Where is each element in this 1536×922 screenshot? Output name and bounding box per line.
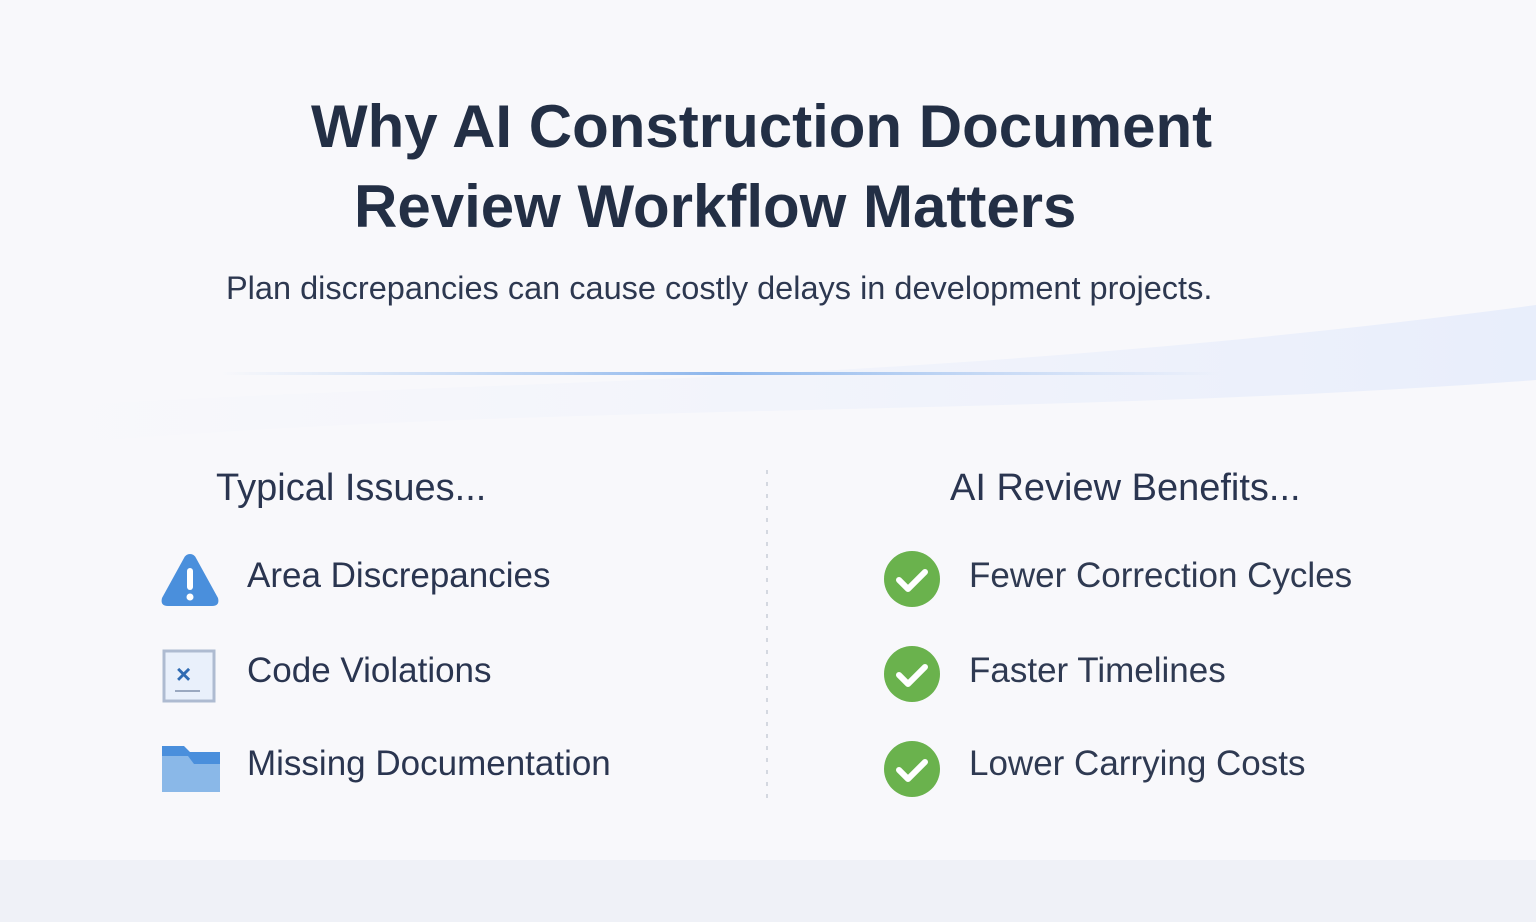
panel: benefits: [884, 551, 1352, 797]
text: area: Area Discrepancies: [247, 556, 550, 595]
icon: code x: [162, 650, 216, 702]
text: missing: Missing Documentation: [247, 744, 611, 783]
text: lower: Lower Carrying Costs: [969, 744, 1306, 783]
icon: check 1: [884, 551, 940, 607]
title: Why AI Construction Document: [311, 93, 1212, 160]
subtitle: Plan discrepancies can cause costly delays in development projects.: [226, 270, 1212, 306]
panel: issues: [162, 554, 611, 792]
heading: benefits: AI Review Benefits...: [950, 467, 1301, 509]
icon: check 3: [884, 741, 940, 797]
title: [311, 93, 1212, 240]
text: fewer: Fewer Correction Cycles: [969, 556, 1352, 595]
icon: check 2: [884, 646, 940, 702]
icon: code x: ×: [176, 659, 191, 689]
icon: warning: [162, 554, 218, 606]
heading: typical issues: Typical Issues...: [216, 467, 486, 509]
text: code: Code Violations: [247, 651, 492, 690]
title: Review Workflow Matters: [354, 173, 1076, 240]
icon: folder: [162, 746, 220, 792]
text: faster: Faster Timelines: [969, 651, 1226, 690]
